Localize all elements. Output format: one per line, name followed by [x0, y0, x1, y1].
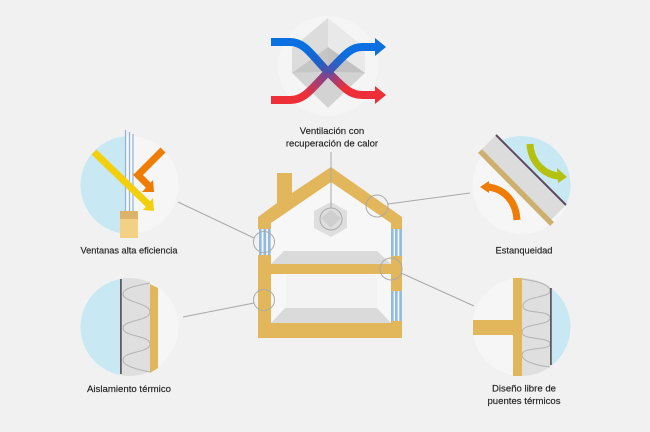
icon: backing circle: [278, 16, 378, 116]
right upper window: [391, 229, 402, 256]
exterior membrane: [550, 288, 552, 365]
heading: ventilation label: Ventilación con: [300, 126, 364, 137]
arrow: blue air stream: [271, 42, 376, 72]
insulation wave: [522, 279, 550, 367]
upper floor: [271, 251, 391, 264]
right lower window: [391, 291, 402, 321]
house interior: [271, 182, 391, 323]
icon: heat exchanger cube: [292, 18, 365, 108]
exterior membrane: [120, 279, 122, 374]
label: insulation caption: Aislamiento térmico: [87, 384, 171, 395]
arrow: green air flow: [530, 144, 567, 183]
insulation band: [482, 135, 566, 221]
panel: airtightness: [478, 134, 570, 226]
detail circle: [522, 278, 570, 376]
arrow: red air stream: [271, 72, 376, 100]
detail circle: [80, 278, 150, 376]
callout: ventilation leader: [320, 152, 342, 230]
lower floor: [271, 308, 391, 323]
wall and slab structure: [473, 278, 522, 376]
label: thermal bridge caption: puentes térmicos: [487, 396, 561, 407]
panel: thermal insulation: [80, 278, 158, 376]
house frame: [258, 167, 402, 338]
interior layer: [480, 151, 552, 224]
glass panes: [126, 130, 133, 212]
heading: ventilation label: recuperación de calor: [286, 138, 379, 150]
arrow: red arrowhead: [375, 86, 386, 104]
label: thermal bridge caption: Diseño libre de: [492, 384, 556, 394]
panel: thermal bridge free design: [473, 278, 570, 376]
panel: heat recovery ventilation: [271, 16, 386, 116]
label: window caption: Ventanas alta eficiencia: [80, 246, 178, 256]
panel: high efficiency windows: [80, 130, 166, 238]
arrow: blue arrowhead: [375, 38, 386, 56]
arrow: reflected heat: [138, 150, 163, 192]
lower storey back wall: [286, 275, 377, 308]
icon: small heat exchanger: [314, 202, 347, 237]
label: airtightness caption: Estanqueidad: [496, 246, 552, 256]
arrow: sunlight: [94, 152, 154, 211]
callout: thermal bridge leader: [380, 258, 474, 306]
structure layer: [150, 284, 158, 373]
arrow: orange air flow: [480, 181, 517, 220]
detail circle: [502, 136, 570, 205]
callout: insulation leader: [183, 290, 274, 317]
window frame: [120, 211, 138, 238]
airtight membrane: [496, 135, 566, 205]
callout: airtightness leader: [366, 193, 470, 217]
panel: house cross-section: [258, 167, 402, 338]
insulation wave: [123, 283, 150, 372]
detail circle: [80, 136, 125, 233]
callout: window leader: [178, 202, 274, 252]
left wall window: [258, 229, 271, 255]
